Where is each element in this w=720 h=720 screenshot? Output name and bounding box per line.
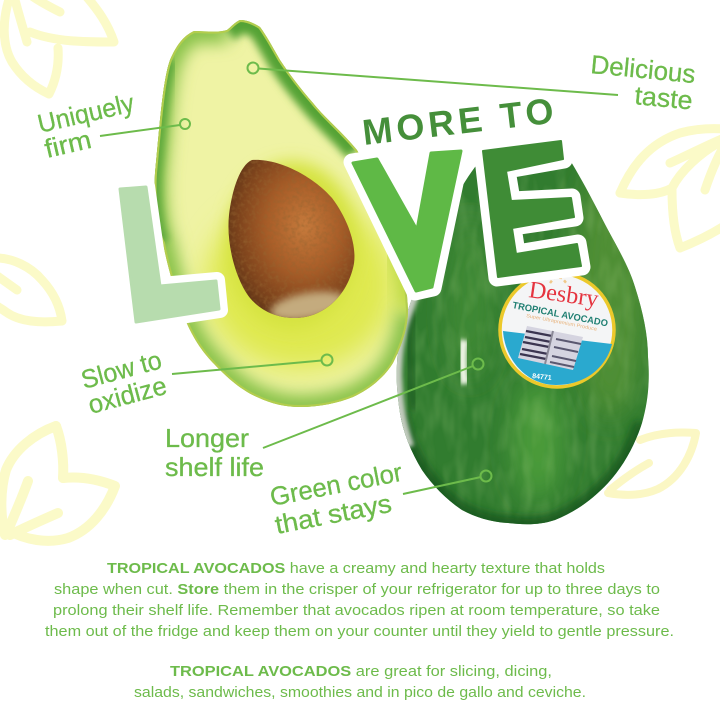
- letter L: [119, 186, 220, 323]
- callout text: [267, 457, 405, 540]
- body text: uses: TROPICAL AVOCADOS are great for slicing, dicing,: [170, 663, 552, 680]
- callout text: Uniquely: [35, 88, 137, 139]
- callout: Uniquely firm: [35, 88, 190, 164]
- icon: leaf bottom right: [608, 433, 696, 495]
- callout line: [172, 354, 332, 374]
- icon: leaf cluster top left: [4, 0, 114, 94]
- callout line: [403, 470, 492, 494]
- sticker code: 84771: [532, 373, 552, 382]
- heading: MORE TO: MORE TO: [360, 90, 556, 153]
- body text: storage: prolong their shelf life. Remember that avocados ripen at room temperature, so take: [53, 602, 660, 619]
- body text: storage: shape when cut. Store them in the crisper of your refrigerator for up to three days to: [54, 581, 660, 598]
- sticker small text: Super Ultrapremium Produce: [526, 313, 598, 333]
- letter V: [352, 150, 462, 292]
- letter E: [482, 140, 582, 278]
- body text: storage: them out of the fridge and keep them on your counter until they yield to gentle pressure.: [45, 623, 674, 640]
- avocado pit: [228, 160, 354, 318]
- body text: uses: [134, 663, 586, 701]
- avocado left shadow: [409, 310, 414, 410]
- callout text: Delicious: [589, 49, 697, 89]
- callout text: [589, 49, 697, 116]
- flesh: [154, 20, 408, 407]
- avocado left rim highlight: [397, 280, 420, 447]
- body text: storage: TROPICAL AVOCADOS have a creamy and hearty texture that holds: [107, 560, 605, 577]
- callout text: oxidize: [85, 370, 170, 420]
- body text: uses: salads, sandwiches, smoothies and in pico de gallo and ceviche.: [134, 684, 586, 701]
- callout text: [35, 88, 137, 164]
- sticker barcode: [518, 326, 583, 370]
- callout text: [165, 423, 264, 482]
- sticker product name: TROPICAL AVOCADO: [511, 300, 609, 329]
- callout text: that stays: [272, 488, 394, 540]
- callout: Slow to oxidize: [78, 345, 332, 420]
- sticker: Desbry label: [500, 273, 614, 387]
- sticker sun rays: [550, 277, 568, 285]
- avocado lower shadow: [400, 413, 642, 524]
- callout: Delicious taste: [248, 49, 697, 116]
- callout text: [78, 345, 170, 420]
- icon: leaf cluster top right: [620, 129, 720, 248]
- callout text: taste: [633, 80, 694, 116]
- callout text: Longer: [165, 423, 249, 453]
- callout line: [263, 358, 484, 448]
- callout: Green color that stays: [267, 457, 492, 540]
- callout text: firm: [42, 124, 94, 164]
- callout text: Green color: [267, 457, 405, 512]
- icon: leaf left middle: [0, 258, 62, 322]
- callout text: shelf life: [165, 452, 264, 482]
- callout line: [248, 62, 618, 95]
- sticker brand name: Desbry: [527, 277, 600, 313]
- icon: leaf cluster bottom left: [1, 426, 115, 541]
- callout text: Slow to: [78, 345, 165, 395]
- sticker blue band: [503, 331, 612, 385]
- halved avocado: [154, 20, 408, 407]
- avocado gloss highlight: [463, 340, 465, 384]
- callout line: [100, 119, 190, 136]
- body text: storage: [45, 560, 674, 640]
- whole tropical avocado: [396, 163, 649, 524]
- callout: Longer shelf life: [165, 358, 484, 482]
